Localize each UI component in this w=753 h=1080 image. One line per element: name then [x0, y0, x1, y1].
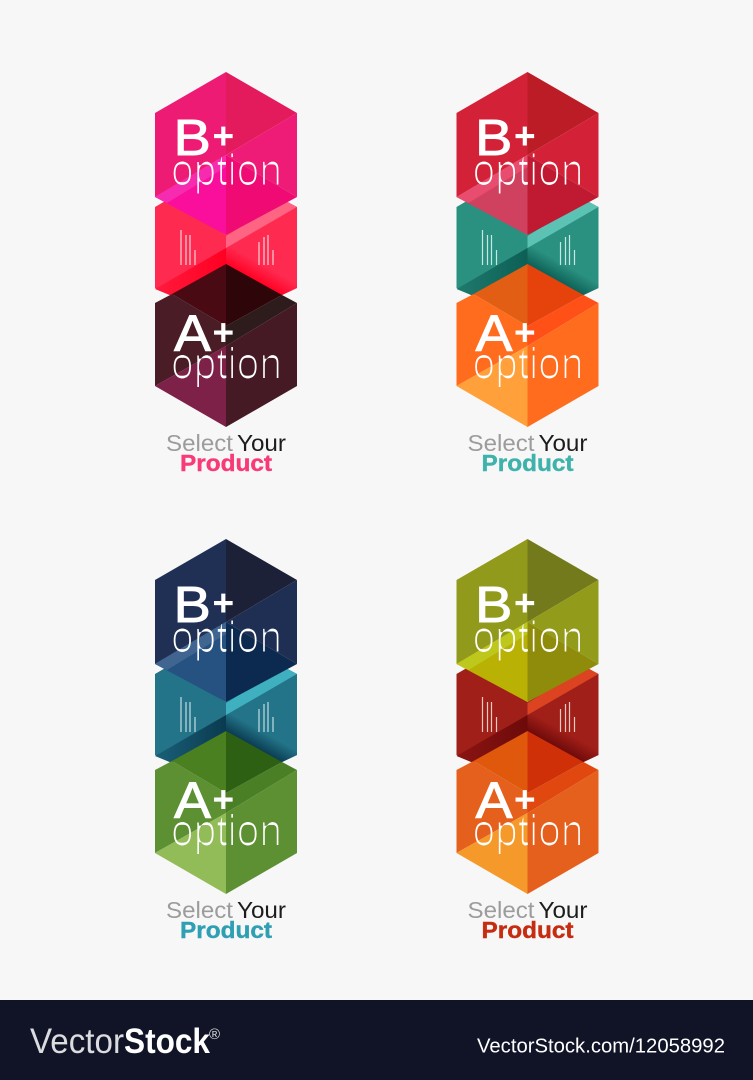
middle band: pink	[155, 200, 297, 296]
caption: Select Your Product	[468, 897, 588, 943]
label: B+ option: B	[174, 576, 211, 633]
bottom hexagon: orange	[456, 731, 598, 894]
label: B+ option	[171, 109, 282, 194]
caption: Select Your Product: Product	[482, 450, 574, 476]
label: A+ option: +	[514, 312, 536, 353]
label: B+ option	[472, 109, 584, 194]
footer url: VectorStock.com/12058992	[477, 1036, 725, 1058]
label: B+ option	[171, 576, 282, 662]
caption: Select Your Product: Product	[180, 917, 272, 943]
label: B+ option: option	[472, 146, 584, 194]
label: A+ option: A	[476, 772, 512, 829]
label: A+ option: option	[171, 807, 282, 855]
label: B+ option: option	[171, 614, 282, 662]
middle band: dark red	[456, 667, 598, 763]
label: A+ option	[171, 305, 282, 388]
top hexagon: red	[456, 72, 598, 235]
panel: teal and orange product	[456, 72, 598, 476]
footer logo: VectorStock: ®	[209, 1026, 220, 1043]
top hexagon: navy	[155, 539, 297, 702]
label: A+ option: A	[174, 772, 211, 829]
label: A+ option: A	[476, 305, 512, 362]
top hexagon: olive	[456, 539, 598, 702]
label: A+ option: +	[212, 779, 234, 820]
label: B+ option: option	[171, 146, 282, 194]
label: A+ option: +	[212, 312, 234, 353]
caption: Select Your Product: Your	[237, 897, 286, 923]
label: B+ option: +	[212, 116, 234, 156]
bottom hexagon: maroon	[155, 264, 297, 427]
bottom hexagon: orange	[456, 264, 598, 427]
footer bar	[0, 1000, 753, 1080]
label: B+ option: option	[472, 614, 584, 662]
panel: olive and orange product	[456, 539, 598, 943]
label: B+ option: B	[475, 576, 512, 633]
label: B+ option: B	[475, 109, 512, 166]
label: A+ option: A	[174, 305, 211, 362]
label: A+ option: +	[514, 779, 536, 820]
panel: navy and green product	[155, 539, 297, 943]
caption: Select Your Product: Select	[166, 430, 234, 456]
footer logo: VectorStock: Stock	[124, 1022, 210, 1061]
label: A+ option: option	[472, 340, 584, 388]
label: B+ option: +	[212, 582, 234, 624]
middle band: blue	[155, 667, 297, 763]
caption: Select Your Product: Your	[538, 897, 588, 923]
caption: Select Your Product: Select	[468, 430, 535, 456]
label: A+ option: option	[472, 807, 584, 855]
footer logo: VectorStock	[30, 1022, 220, 1061]
bottom hexagon: green	[155, 731, 297, 894]
panel: pink product	[155, 72, 297, 476]
label: A+ option	[171, 772, 282, 855]
caption: Select Your Product: Product	[180, 450, 272, 476]
label: A+ option: option	[171, 340, 282, 388]
label: A+ option	[472, 772, 584, 855]
top hexagon: pink	[155, 72, 297, 235]
footer logo: VectorStock: Vector	[30, 1022, 124, 1061]
label: B+ option: +	[514, 116, 536, 156]
label: B+ option: B	[174, 109, 211, 166]
label: B+ option	[472, 576, 584, 662]
label: B+ option: +	[514, 582, 536, 624]
label: A+ option	[472, 305, 584, 388]
caption: Select Your Product	[166, 430, 286, 476]
middle band: teal	[456, 200, 598, 296]
caption: Select Your Product: Select	[166, 897, 234, 923]
caption: Select Your Product: Your	[237, 430, 286, 456]
caption: Select Your Product: Product	[482, 917, 574, 943]
caption: Select Your Product	[468, 430, 588, 476]
caption: Select Your Product	[166, 897, 286, 943]
caption: Select Your Product: Select	[468, 897, 535, 923]
caption: Select Your Product: Your	[538, 430, 588, 456]
